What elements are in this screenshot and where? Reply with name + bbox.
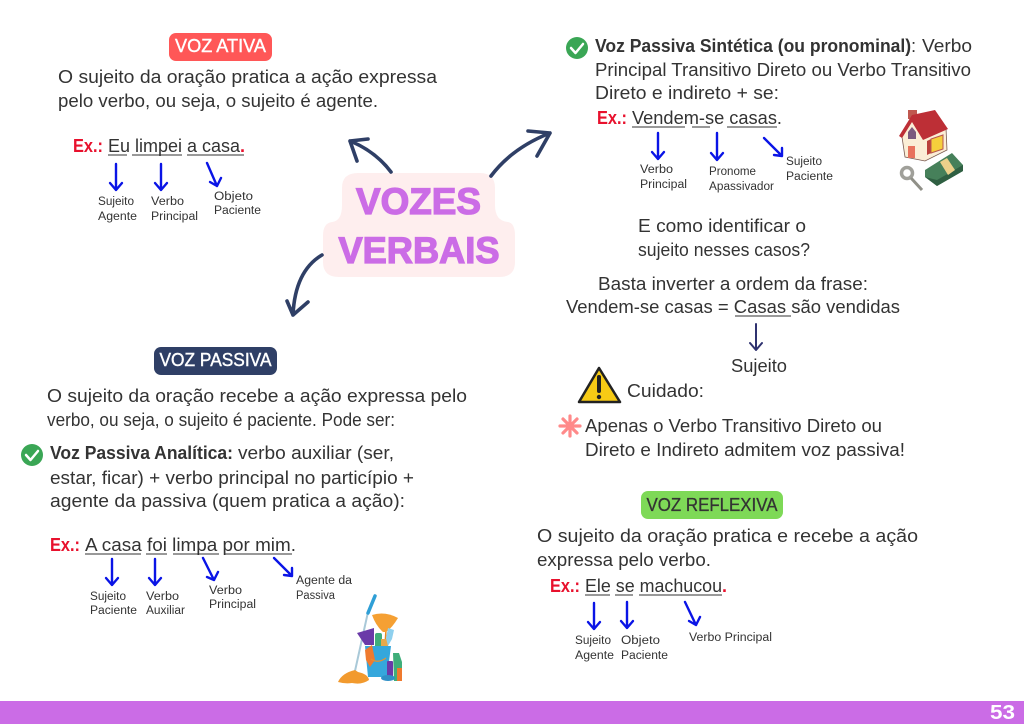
text: warning note: Apenas o Verbo Transitivo Direto ou xyxy=(585,416,882,436)
example: Ele se machucou: Ex.: xyxy=(550,576,580,596)
text: Voz Reflexiva definition: O sujeito da oração pratica e recebe a ação xyxy=(537,526,918,546)
arrow to Voz Ativa xyxy=(350,139,391,172)
icon: house, key and money xyxy=(899,110,963,190)
annotations: Vendem-se casas xyxy=(640,133,833,193)
annotations: Ele se machucou: Verbo Principal xyxy=(689,632,772,644)
text: como identificar o sujeito xyxy=(638,216,810,260)
arrow to Voz Passiva Sintética xyxy=(491,131,550,176)
text: Voz Passiva Analítica: verbo auxiliar (ser, xyxy=(238,443,394,463)
page number: 53 xyxy=(990,702,1015,724)
arrow: Casas to Sujeito xyxy=(750,324,762,350)
annotations: Eu limpei a casa xyxy=(98,163,261,223)
text: warning note: Direto e Indireto admitem voz passiva! xyxy=(585,440,905,460)
central title: Vozes Verbais xyxy=(323,173,515,277)
text: Voz Passiva Analítica: Voz Passiva Analítica: xyxy=(50,443,233,463)
text: Voz Passiva Sintética: Verbo xyxy=(922,36,972,56)
text: Voz Passiva definition xyxy=(47,386,467,430)
text: como identificar o sujeito: sujeito nesses casos? xyxy=(638,240,810,260)
annotations: A casa foi limpa por mim: Verbo xyxy=(209,585,242,597)
text: Voz Ativa definition: O sujeito da oração pratica a ação expressa xyxy=(58,67,438,87)
heading: Voz Ativa: VOZ ATIVA xyxy=(175,36,266,56)
text: Voz Passiva Sintética: Direto e indireto + se: xyxy=(595,83,779,103)
text: Voz Passiva definition: verbo, ou seja, o sujeito é paciente. Pode ser: xyxy=(47,410,395,430)
icon: pink asterisk xyxy=(560,416,580,436)
annotations: Vendem-se casas: Verbo xyxy=(640,164,673,176)
example: A casa foi limpa por mim: A casa foi limpa por mim. xyxy=(85,535,296,555)
annotations: Ele se machucou xyxy=(575,602,772,662)
annotations: Eu limpei a casa: Agente xyxy=(98,211,137,223)
annotations: Eu limpei a casa: Verbo xyxy=(151,196,184,208)
annotations: Vendem-se casas: Paciente xyxy=(786,171,833,183)
annotations: Eu limpei a casa: Paciente xyxy=(214,205,261,217)
text: Voz Ativa definition xyxy=(58,67,438,111)
example: Vendem-se casas: Ex.: xyxy=(597,108,627,128)
annotations: Eu limpei a casa: Objeto xyxy=(214,191,253,203)
heading: Voz Passiva: VOZ PASSIVA xyxy=(160,350,272,370)
heading: Voz Reflexiva: VOZ REFLEXIVA xyxy=(646,495,778,515)
text: Voz Reflexiva definition: expressa pelo verbo. xyxy=(537,550,711,570)
text: inverter a ordem da frase: Vendem-se casas = Casas são vendidas xyxy=(566,297,900,317)
annotations: A casa foi limpa por mim: Verbo xyxy=(146,591,179,603)
annotations: Eu limpei a casa: Sujeito xyxy=(98,196,134,208)
heading: Voz Ativa xyxy=(169,33,272,61)
annotations: Ele se machucou: Sujeito xyxy=(575,635,611,647)
central title: Vozes Verbais: VERBAIS xyxy=(338,230,500,271)
text: Voz Ativa definition: pelo verbo, ou seja, o sujeito é agente. xyxy=(58,91,378,111)
text: inverter a ordem da frase: Basta inverter a ordem da frase: xyxy=(598,274,868,294)
text: Voz Passiva Analítica: agente da passiva (quem pratica a ação): xyxy=(50,491,405,511)
icon: check analítica xyxy=(21,444,43,466)
icon: warning triangle xyxy=(579,368,620,402)
label: Sujeito: Sujeito xyxy=(731,356,787,376)
text: Voz Passiva Analítica xyxy=(50,443,414,511)
text: Voz Passiva definition: O sujeito da oração recebe a ação expressa pelo xyxy=(47,386,467,406)
annotations: Ele se machucou: Agente xyxy=(575,650,614,662)
annotations: A casa foi limpa por mim: Paciente xyxy=(90,605,137,617)
text: inverter a ordem da frase xyxy=(566,274,900,317)
example: Vendem-se casas: Vendem-se casas. xyxy=(632,108,782,128)
annotations: Eu limpei a casa: Principal xyxy=(151,211,198,223)
annotations: A casa foi limpa por mim: Agente da xyxy=(296,575,353,587)
annotations: A casa foi limpa por mim: Passiva xyxy=(296,590,336,602)
example: Eu limpei a casa: Eu limpei a casa. xyxy=(108,136,245,156)
text: como identificar o sujeito: E como identificar o xyxy=(638,216,806,236)
text: warning note xyxy=(585,416,905,460)
arrow to Voz Passiva xyxy=(287,255,322,315)
annotations: Vendem-se casas: Apassivador xyxy=(709,181,774,193)
heading: Voz Reflexiva xyxy=(641,491,783,519)
text: Voz Passiva Sintética: Principal Transitivo Direto ou Verbo Transitivo xyxy=(595,60,971,80)
annotations: Vendem-se casas: Sujeito xyxy=(786,156,822,168)
label: Cuidado: Cuidado: xyxy=(627,381,704,401)
example: Ele se machucou: Ele se machucou. xyxy=(585,576,727,596)
text: Voz Reflexiva definition xyxy=(537,526,918,570)
example: Eu limpei a casa: Ex.: xyxy=(73,136,103,156)
text: Voz Passiva Sintética: Voz Passiva Sintética (ou pronominal): xyxy=(595,36,916,56)
text: Voz Passiva Analítica: estar, ficar) + verbo principal no particípio + xyxy=(50,468,414,488)
annotations: A casa foi limpa por mim xyxy=(90,558,353,617)
text: Voz Passiva Sintética xyxy=(595,36,972,103)
icon: check sintética xyxy=(566,37,588,59)
heading: Voz Passiva xyxy=(154,347,277,375)
annotations: A casa foi limpa por mim: Sujeito xyxy=(90,591,126,603)
annotations: Ele se machucou: Paciente xyxy=(621,650,668,662)
central title: Vozes Verbais: VOZES xyxy=(356,181,481,222)
annotations: A casa foi limpa por mim: Auxiliar xyxy=(146,605,185,617)
footer bar xyxy=(0,701,1024,724)
icon: cleaning bucket and mop xyxy=(338,596,402,684)
annotations: A casa foi limpa por mim: Principal xyxy=(209,599,256,611)
annotations: Vendem-se casas: Pronome xyxy=(709,166,756,178)
annotations: Vendem-se casas: Principal xyxy=(640,179,687,191)
annotations: Ele se machucou: Objeto xyxy=(621,635,660,647)
example: A casa foi limpa por mim: Ex.: xyxy=(50,535,80,555)
